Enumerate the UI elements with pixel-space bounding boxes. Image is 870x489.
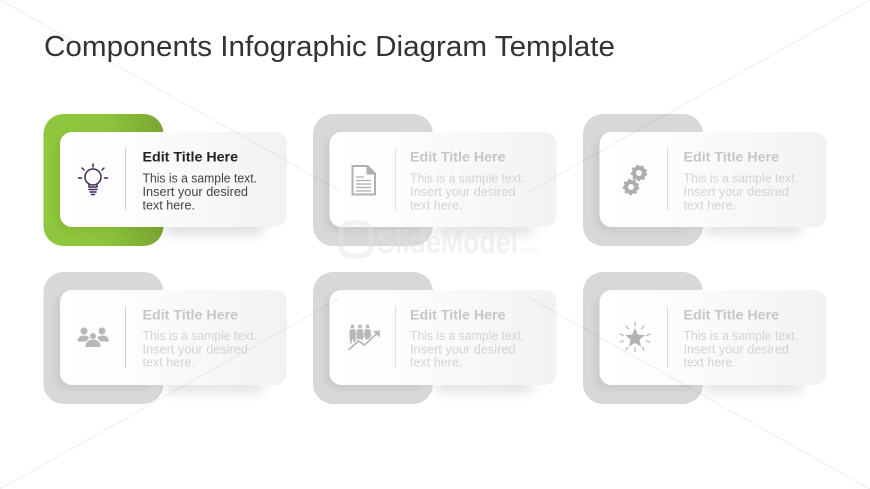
icon: document bbox=[352, 166, 375, 194]
text: card 2: Insert your desired bbox=[410, 184, 516, 199]
grey back square bbox=[313, 114, 433, 246]
text: card 3: Insert your desired bbox=[684, 184, 789, 199]
text: card 4: Edit Title Here bbox=[142, 307, 239, 322]
text: card 1: This is a sample text. bbox=[142, 170, 257, 186]
grey back square bbox=[583, 114, 703, 246]
panel: card 1 light bulb bbox=[44, 114, 287, 246]
watermark: SlideModel.com: .com bbox=[519, 245, 538, 255]
text: card 2: This is a sample text. bbox=[410, 170, 524, 186]
panel: card 3 gears bbox=[583, 114, 826, 246]
panel: card 4 team bbox=[44, 272, 287, 404]
icon: people with growth arrow bbox=[348, 324, 380, 350]
icon: light bulb bbox=[78, 164, 108, 194]
title: Components Infographic Diagram Template bbox=[44, 31, 615, 63]
text: card 6: Edit Title Here bbox=[684, 307, 780, 322]
text: card 2: text here. bbox=[410, 197, 462, 212]
panel: card 5 growth bbox=[313, 272, 556, 404]
text: card 5: Edit Title Here bbox=[410, 307, 506, 322]
text: card 2 bbox=[410, 150, 524, 212]
text: card 5: text here. bbox=[410, 355, 462, 370]
icon: gears bbox=[624, 166, 646, 194]
text: card 5 bbox=[410, 307, 524, 370]
text: card 6: text here. bbox=[684, 355, 736, 370]
text: card 4: text here. bbox=[142, 355, 195, 370]
white card bbox=[600, 290, 826, 385]
green back square bbox=[44, 114, 164, 246]
white card bbox=[330, 290, 556, 385]
text: card 5: Insert your desired bbox=[410, 341, 516, 356]
panel: card 6 star bbox=[583, 272, 826, 404]
grey back square bbox=[313, 272, 433, 404]
white card bbox=[60, 290, 287, 385]
text: card 3: text here. bbox=[684, 197, 736, 212]
white card bbox=[330, 132, 556, 227]
white card bbox=[600, 132, 826, 227]
text: card 4: This is a sample text. bbox=[142, 328, 257, 343]
text: card 1 bbox=[142, 150, 257, 212]
text: card 3 bbox=[684, 150, 798, 212]
text: card 3: Edit Title Here bbox=[684, 150, 780, 164]
icon: star burst bbox=[620, 322, 650, 352]
icon: team bbox=[78, 328, 109, 347]
text: card 1: Edit Title Here bbox=[142, 150, 239, 164]
text: card 4: Insert your desired bbox=[142, 341, 248, 356]
text: card 1: Insert your desired bbox=[142, 184, 248, 199]
text: card 2: Edit Title Here bbox=[410, 150, 506, 164]
text: card 4 bbox=[142, 307, 257, 370]
text: card 3: This is a sample text. bbox=[684, 170, 798, 186]
text: card 6: Insert your desired bbox=[684, 341, 789, 356]
text: card 1: text here. bbox=[142, 197, 195, 212]
text: card 6: This is a sample text. bbox=[684, 328, 798, 343]
watermark: SlideModel.com: SlideModel bbox=[377, 224, 518, 260]
grey back square bbox=[44, 272, 164, 404]
grey back square bbox=[583, 272, 703, 404]
white card bbox=[60, 132, 287, 227]
text: card 5: This is a sample text. bbox=[410, 328, 524, 343]
panel: card 2 document bbox=[313, 114, 556, 246]
text: card 6 bbox=[684, 307, 798, 370]
